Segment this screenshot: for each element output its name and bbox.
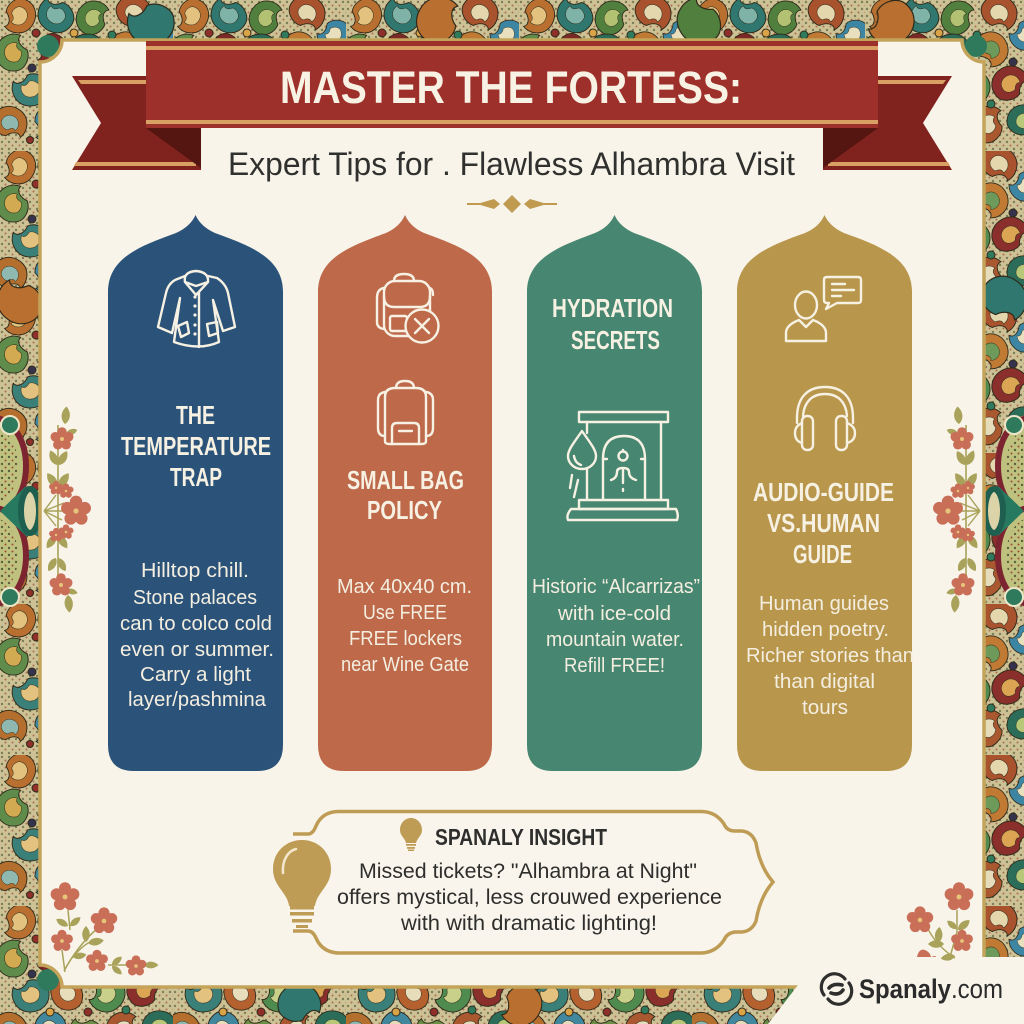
logo corner background patch	[768, 957, 1024, 1024]
card heading: SMALL BAG	[347, 465, 464, 495]
card heading: AUDIO-GUIDE	[753, 477, 894, 507]
card body text: Max 40x40 cm.	[337, 576, 472, 598]
callout body text: with with dramatic lighting!	[400, 912, 657, 935]
right side floral	[933, 406, 980, 613]
card body text: mountain water.	[546, 629, 684, 651]
callout body text: offers mystical, less crouwed experience	[337, 886, 722, 909]
callout body text	[337, 860, 722, 935]
ribbon main band	[146, 41, 878, 128]
card body text: Use FREE	[363, 602, 447, 624]
title ribbon	[72, 41, 952, 170]
card body text: FREE lockers	[349, 628, 462, 650]
card body text	[532, 576, 700, 677]
card shape	[108, 215, 283, 771]
card body text	[120, 560, 274, 711]
callout heading: SPANALY INSIGHT	[435, 824, 607, 850]
card heading: TEMPERATURE	[121, 431, 271, 461]
callout body text: Missed tickets? "Alhambra at Night"	[359, 860, 697, 883]
callout: Spanaly insight	[273, 812, 773, 953]
card body text: Historic “Alcarrizas”	[532, 576, 700, 598]
icon: large lightbulb	[273, 840, 331, 928]
card body text: layer/pashmina	[128, 689, 267, 711]
card shape	[527, 215, 702, 771]
card body text: Stone palaces	[133, 587, 257, 609]
panel: small bag policy	[318, 215, 492, 771]
decorative diamond ornament	[467, 195, 557, 213]
icon: crossed backpack	[377, 274, 438, 342]
left side floral	[44, 406, 91, 613]
panel: audio guide vs human guide	[737, 215, 914, 771]
logo wordmark: Spanaly.com	[859, 974, 1003, 1004]
callout frame	[293, 812, 773, 953]
card heading	[121, 400, 271, 492]
card body text: near Wine Gate	[341, 654, 469, 676]
bottom-left corner floral	[51, 882, 158, 977]
card body text: Human guides	[759, 593, 889, 615]
card heading: SECRETS	[571, 325, 660, 355]
left medallion	[0, 416, 39, 606]
icon: small lightbulb	[400, 818, 422, 851]
icon: small backpack	[378, 381, 433, 444]
card body text: Refill FREE!	[564, 655, 665, 677]
panel: hydration secrets	[527, 215, 702, 771]
bottom-right corner floral	[907, 882, 973, 962]
icon: water fountain	[567, 412, 678, 520]
card shape	[737, 215, 912, 771]
icon: headphones	[795, 387, 855, 450]
icon: person with speech bubble	[786, 277, 861, 341]
card heading: VS.HUMAN	[767, 508, 880, 538]
subtitle: Expert Tips for . Flawless Alhambra Visit	[228, 146, 795, 182]
card shape	[318, 215, 492, 771]
card heading	[552, 293, 673, 355]
right ribbon tail	[823, 76, 952, 170]
card heading	[347, 465, 464, 525]
card heading: GUIDE	[793, 539, 852, 569]
logo icon	[821, 974, 852, 1004]
card body text: tours	[802, 697, 848, 719]
card body text: with ice-cold	[557, 603, 671, 625]
icon: jacket	[158, 271, 235, 347]
card body text: Hilltop chill.	[141, 560, 249, 582]
card heading: POLICY	[367, 495, 442, 525]
right medallion	[985, 416, 1024, 606]
card heading: HYDRATION	[552, 293, 673, 323]
main title: MASTER THE FORTESS:	[280, 62, 742, 113]
card heading	[753, 477, 894, 569]
card body text: even or summer.	[120, 639, 274, 661]
card body text: hidden poetry.	[762, 619, 889, 641]
card body text: Carry a light	[140, 664, 251, 686]
card heading: TRAP	[170, 462, 222, 492]
card body text	[337, 576, 472, 676]
card heading: THE	[176, 400, 215, 430]
card body text: can to colco cold	[120, 613, 272, 635]
Spanaly logo	[821, 974, 1003, 1004]
card body text	[746, 593, 914, 719]
card body text: than digital	[774, 671, 875, 693]
left ribbon tail	[72, 76, 201, 170]
card body text: Richer stories than	[746, 645, 914, 667]
panel: temperature trap	[108, 215, 283, 771]
